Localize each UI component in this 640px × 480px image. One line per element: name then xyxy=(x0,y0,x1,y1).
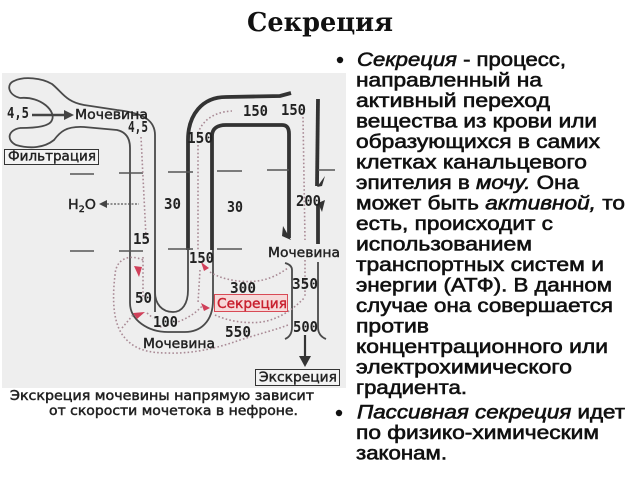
numbers xyxy=(133,101,321,341)
box: secretion: Секреция xyxy=(217,296,287,312)
label: 4,5 with arrow to urea xyxy=(7,104,74,122)
text block: active secretion: случае она совершается xyxy=(356,296,613,317)
bullet: second xyxy=(336,410,342,416)
text block: passive secretion: по физико-химическим xyxy=(356,423,599,444)
nephron tube: thin walls xyxy=(9,78,326,339)
level ticks xyxy=(70,170,335,251)
text block: active secretion: есть, происходит с xyxy=(356,214,553,235)
label: H2O with dotted arrow xyxy=(68,197,139,215)
dotted urea pathways xyxy=(114,111,305,353)
numbers: 30 xyxy=(227,198,243,216)
label: urea top: Мочевина xyxy=(75,107,148,123)
bullet: first xyxy=(337,57,343,63)
box: excretion: Экскреция xyxy=(259,370,337,386)
text block: active secretion: электрохимического xyxy=(356,358,572,378)
text block: active secretion xyxy=(356,50,625,399)
text block: active secretion: эпителия в мочу. Она xyxy=(356,173,580,194)
diagram caption: от скорости мочетока в нефроне. xyxy=(49,403,298,419)
text block: passive secretion: законам. xyxy=(356,444,447,464)
numbers: 150 xyxy=(189,249,214,267)
diagram caption: Экскреция мочевины напрямую зависит xyxy=(10,388,314,404)
numbers: 15 xyxy=(133,230,150,248)
numbers: 350 xyxy=(292,275,318,293)
label: urea right: Мочевина xyxy=(268,245,340,261)
numbers: 150 xyxy=(243,102,268,120)
text block: active secretion: использованием xyxy=(356,234,532,256)
diagram caption xyxy=(10,388,314,419)
numbers: 550 xyxy=(225,323,251,341)
text block: active secretion: концентрационного или xyxy=(356,337,608,358)
text block: active secretion: транспортных систем и xyxy=(356,255,604,276)
text block: passive secretion: Пассивная секреция идет xyxy=(357,402,625,424)
numbers: 50 xyxy=(135,289,152,307)
numbers: 300 xyxy=(230,279,256,297)
numbers: 150 xyxy=(281,101,306,119)
numbers: 500 xyxy=(293,318,318,336)
numbers: 200 xyxy=(296,192,321,210)
text block: active secretion: градиента. xyxy=(356,378,467,399)
text block: active secretion: против xyxy=(356,316,429,338)
label: 4,5 with arrow to urea: 4,5 xyxy=(7,104,29,122)
text block: passive secretion xyxy=(356,402,625,464)
text block: active secretion: клетках канальцевого xyxy=(356,152,587,174)
text block: active secretion: Секреция - процесс, xyxy=(357,50,566,71)
thick ascending limb and collecting duct xyxy=(188,93,325,250)
text block: active secretion: может быть активной, то xyxy=(356,194,625,214)
text block: active secretion: энергии (АТФ). В данном xyxy=(356,276,612,296)
text block: active secretion: активный переход xyxy=(356,91,550,112)
panel: nephron diagram xyxy=(2,73,346,388)
arrow to excretion xyxy=(299,335,311,367)
number 4,5: 4,5 xyxy=(128,118,148,136)
label: H2O with dotted arrow: 2 xyxy=(79,205,85,215)
label: H2O with dotted arrow: H xyxy=(68,197,78,213)
title: Секреция xyxy=(247,8,393,38)
numbers: 100 xyxy=(153,313,178,331)
label: H2O with dotted arrow: O xyxy=(85,197,96,213)
label: urea bottom: Мочевина xyxy=(143,336,215,352)
text block: active secretion: направленный на xyxy=(356,70,543,92)
red arrowheads xyxy=(133,262,210,319)
numbers: 30 xyxy=(164,195,181,213)
box: filtration: Фильтрация xyxy=(8,148,96,164)
text block: active secretion: образующихся в самих xyxy=(356,132,601,153)
text block: active secretion: вещества из крови или xyxy=(356,112,597,132)
numbers: 150 xyxy=(187,129,213,147)
